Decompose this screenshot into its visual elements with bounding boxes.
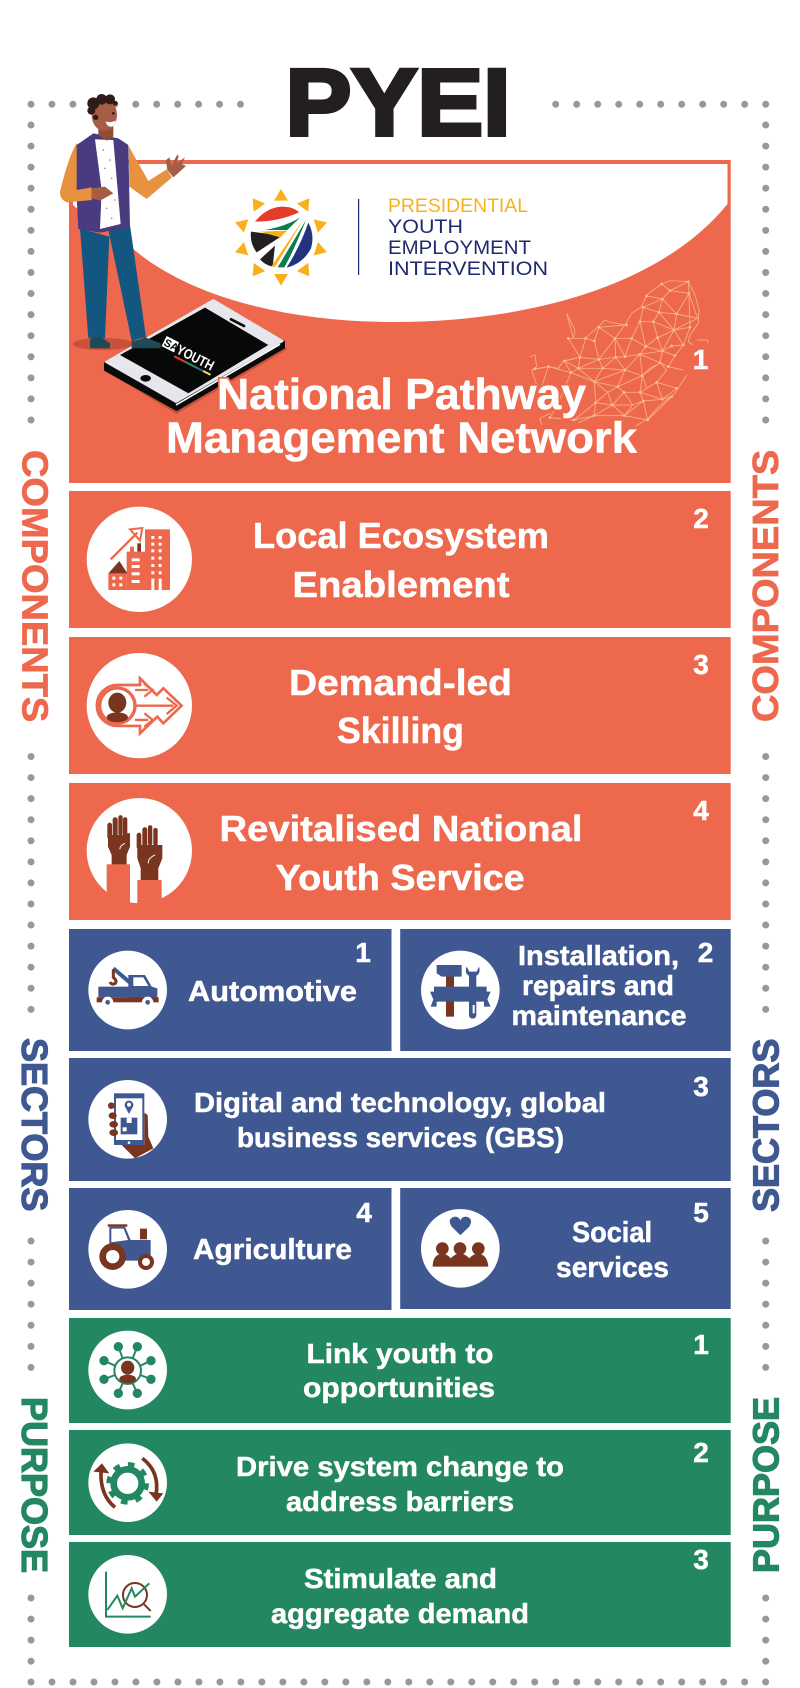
label: Automotive — [188, 976, 357, 1008]
number 3: 3 — [693, 649, 709, 680]
label: Stimulate and — [304, 1563, 497, 1594]
phone screen text: YOUTH — [174, 341, 217, 374]
number 2: 2 — [693, 503, 709, 534]
label: Social — [572, 1217, 652, 1249]
phone screen text — [160, 334, 218, 375]
panel: sector 4 Agriculture — [69, 1188, 392, 1310]
logo: wordmark: YOUTH — [388, 217, 463, 238]
number 5: 5 — [693, 1197, 709, 1228]
number 1: 1 — [355, 937, 371, 968]
number 4: 4 — [356, 1197, 372, 1228]
label: Local Ecosystem — [253, 515, 549, 556]
panel: component 3 Demand-led Skilling — [69, 637, 731, 774]
label: Skilling — [337, 710, 464, 751]
label: services — [556, 1252, 669, 1284]
panel: sector 3 Digital and technology, GBS — [69, 1058, 731, 1181]
icon: tractor — [88, 1210, 167, 1289]
label: Agriculture — [193, 1234, 352, 1266]
illustration: phone — [103, 300, 287, 414]
panel: component 2 Local Ecosystem Enablement — [69, 491, 731, 628]
phone screen text: SA — [162, 337, 181, 355]
icon: chart with magnifier — [88, 1555, 167, 1634]
panel: sector 1 Automotive — [69, 929, 392, 1051]
label: Youth Service — [276, 857, 525, 898]
logo: wordmark: INTERVENTION — [388, 259, 548, 280]
side label: sectors left: SECTORS — [14, 1038, 55, 1211]
number 3: 3 — [693, 1544, 709, 1575]
heading: National Pathway Management Network: National Pathway — [217, 370, 587, 419]
icon: city growth — [87, 507, 192, 612]
panel: sector 2 Installation, repairs and maintenance — [400, 929, 731, 1051]
panel: sector 5 Social services — [400, 1188, 731, 1309]
label: address barriers — [286, 1486, 514, 1517]
side label: purpose right: PURPOSE — [746, 1397, 786, 1573]
label: Link youth to — [306, 1338, 494, 1369]
number 2: 2 — [698, 937, 713, 968]
label — [253, 515, 549, 605]
logo: wordmark: PRESIDENTIAL — [388, 196, 528, 217]
label: opportunities — [303, 1372, 495, 1403]
title: PYEI: PYEI — [286, 49, 511, 156]
logo: wordmark: EMPLOYMENT — [388, 238, 531, 259]
icon: person with arrows — [87, 653, 192, 758]
icon: hammer and wrench — [421, 951, 500, 1029]
number 3: 3 — [693, 1071, 709, 1102]
label: aggregate demand — [271, 1598, 529, 1629]
label: Revitalised National — [220, 808, 582, 849]
side label: components right: COMPONENTS — [745, 450, 786, 722]
label: Installation, — [518, 940, 679, 971]
illustration: presenter man — [60, 94, 186, 350]
number 4: 4 — [693, 795, 709, 826]
icon: raised hands — [87, 798, 192, 913]
label — [220, 808, 582, 898]
heading: National Pathway Management Network: Management Network — [166, 414, 638, 462]
label: maintenance — [512, 1000, 686, 1031]
number 1: 1 — [693, 344, 708, 375]
side label: sectors right: SECTORS — [746, 1039, 786, 1212]
panel: purpose 1 Link youth to opportunities — [69, 1318, 731, 1423]
label — [236, 1451, 564, 1517]
map of South Africa network — [530, 280, 708, 427]
label — [271, 1563, 529, 1629]
side label: purpose left: PURPOSE — [14, 1397, 55, 1573]
label — [556, 1217, 669, 1284]
icon: people with heart — [421, 1209, 500, 1288]
number 2: 2 — [693, 1437, 709, 1468]
label — [303, 1338, 495, 1403]
panel: purpose 3 Stimulate and aggregate demand — [69, 1542, 731, 1647]
icon: network person — [88, 1331, 167, 1409]
panel: component 4 Revitalised National Youth Service — [69, 783, 731, 920]
panel: purpose 2 Drive system change — [69, 1430, 731, 1535]
label — [289, 662, 512, 751]
label — [512, 940, 686, 1031]
logo: wordmark — [388, 196, 548, 280]
side label: components left: COMPONENTS — [15, 450, 56, 722]
label: Enablement — [292, 564, 510, 605]
white curved header — [73, 164, 728, 322]
label: Drive system change to — [236, 1451, 564, 1482]
label: repairs and — [522, 970, 674, 1001]
logo: divider — [358, 199, 359, 275]
icon: tow truck — [88, 951, 167, 1029]
label: Demand-led — [289, 662, 512, 703]
heading: National Pathway Management Network — [166, 370, 638, 462]
label: Digital and technology, global — [194, 1087, 606, 1118]
label: business services (GBS) — [237, 1122, 564, 1153]
number 1: 1 — [693, 1329, 709, 1360]
icon: phone in hand — [88, 1080, 167, 1159]
heading: National Pathway Management Network: National Pathway — [217, 370, 587, 419]
logo: sun emblem — [233, 189, 329, 286]
icon: gear with cycle arrows — [88, 1443, 167, 1522]
panel: component 1 National Pathway Management Network — [69, 160, 731, 483]
label — [194, 1087, 606, 1153]
